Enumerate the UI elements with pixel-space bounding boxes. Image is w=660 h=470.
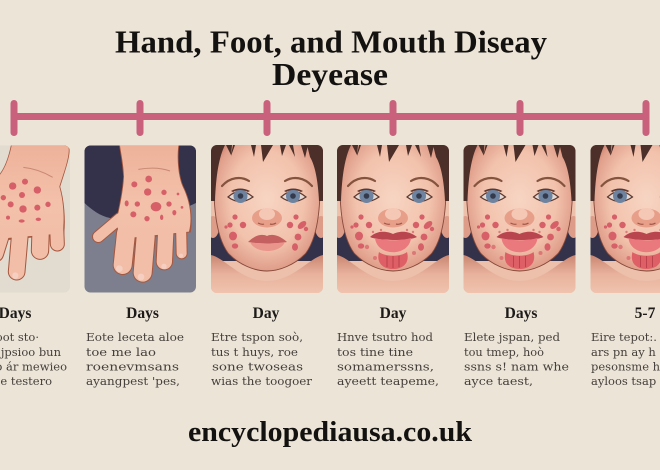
column 2 text: Eote leceta aloe [86,330,184,344]
column 4 text: somamerssns, [337,360,434,374]
column 3 text: Day [253,305,280,322]
column 2 text: Days [126,305,159,322]
column 3 text [211,305,313,388]
column 6 text: Eire tepot:. [591,330,657,344]
column 2 text: toe me lao [86,345,156,359]
column 3 text: sone twoseas [212,360,303,374]
column 1 text: e testero [0,374,52,388]
icon: hand with spots [0,146,69,279]
column 5 text: Elete jspan, ped [464,330,561,344]
column 5 text: tou tmep, hoò [464,345,544,359]
title: Hand, Foot, and Mouth Diseay [115,24,547,60]
column 6 text: ars pn ay h [591,345,656,359]
column 4 text: tos tine tine [337,345,413,359]
column 4 text: Day [380,305,407,322]
column 5 text: ssns s! nam whe [464,360,569,374]
column 6 text: 5-7 [635,305,656,322]
panel: hand on dark background [84,146,196,292]
column 3 text: Etre tspon soò, [211,330,303,344]
column 2 text: roenevmsans [86,360,179,374]
column 6 text [591,305,660,388]
column 4 text: Hnve tsutro hod [337,330,434,344]
timeline [10,100,650,136]
column 6 text: pesonsme h [591,360,660,374]
column 5 text: ayce taest, [464,374,533,388]
icon: hand with spots [98,146,191,280]
panel: child's face with mouth sores, third [460,133,580,293]
panel: child's face with mouth sores [333,133,453,293]
column 4 text [337,305,439,388]
column 2 text [86,305,184,388]
column 5 text: Days [505,305,537,322]
title [115,24,547,92]
column 1 text [0,305,67,388]
column 3 text: tus t huys, roe [211,345,298,359]
column 5 text [464,305,569,388]
column 4 text: ayeett teapeme, [337,374,439,388]
column 6 text: ayloos tsap [591,374,656,388]
panel: child's face cropped at right edge [586,133,660,293]
title: Deyease [272,56,388,92]
column 3 text: wias the toogoer [211,374,313,388]
column 2 text: ayangpest 'pes, [86,374,180,388]
footer website: encyclopediausa.co.uk [188,417,472,448]
panel: hand on light background [0,146,70,292]
column 1 text: jpsioo bun [0,345,62,359]
panel: child's face with cheek spots [207,133,327,293]
